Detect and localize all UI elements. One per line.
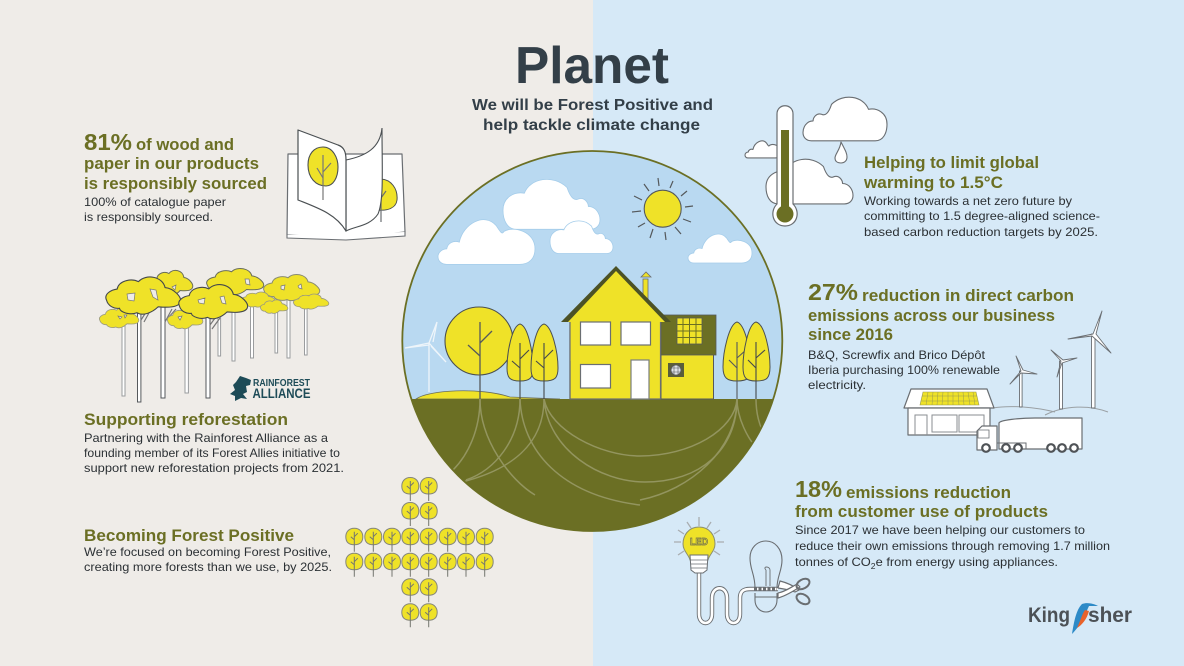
old bulb [750, 541, 782, 588]
text block: customer emissions reduction: from customer use of products [795, 502, 1048, 521]
text block: limiting global warming: Helping to limit global [864, 153, 1039, 172]
icon: grid of small trees in a plus shape [346, 478, 493, 627]
icon: LED bulb, wire, scissors and old bulb [674, 517, 811, 623]
text block: customer emissions reduction: 18% [795, 476, 842, 502]
logo: Rainforest Alliance [230, 376, 310, 401]
text block: becoming forest positive [84, 526, 332, 574]
text block: direct carbon reduction: since 2016 [808, 325, 893, 344]
text block: supporting reforestation: Partnering with the Rainforest Alliance as a [84, 431, 328, 445]
scissors [778, 577, 811, 606]
text block: limiting global warming: based carbon reduction targets by 2025. [864, 225, 1098, 239]
icon: frog [230, 376, 251, 401]
trees left [445, 307, 558, 399]
central circular scene [400, 150, 785, 534]
text block: responsibly sourced wood and paper: of wood and [136, 135, 234, 154]
text block: becoming forest positive: creating more forests than we use, by 2025. [84, 560, 332, 574]
text block: becoming forest positive: We’re focused on becoming Forest Positive, [84, 545, 331, 559]
text block: customer emissions reduction: e from energy using appliances. [876, 555, 1058, 569]
icon: thermometer and clouds [745, 97, 887, 226]
text block: responsibly sourced wood and paper: 100% of catalogue paper [84, 195, 226, 209]
text block: limiting global warming: Working towards a net zero future by [864, 194, 1072, 208]
house [561, 266, 716, 399]
sun [632, 178, 693, 240]
text block: customer emissions reduction: 2 [871, 562, 876, 571]
subtitle: help tackle climate change [483, 117, 700, 134]
text block: supporting reforestation: Supporting reforestation [84, 410, 288, 429]
logo: Kingfisher [1028, 603, 1132, 634]
text block: direct carbon reduction: reduction in direct carbon [862, 286, 1074, 305]
text block: direct carbon reduction: 27% [808, 279, 858, 305]
text block: direct carbon reduction: Iberia purchasing 100% renewable [808, 363, 1000, 377]
sky [400, 150, 785, 400]
clouds [438, 179, 752, 264]
wire [699, 573, 778, 623]
wind turbine [405, 322, 446, 392]
text block: customer emissions reduction [795, 476, 1110, 571]
trees right [723, 322, 770, 399]
text block: responsibly sourced wood and paper: is responsibly sourced. [84, 210, 213, 224]
logo: Rainforest Alliance: ALLIANCE [252, 385, 310, 401]
clouds behind thermometer [745, 97, 887, 204]
text block: limiting global warming: warming to 1.5°C [863, 173, 1003, 192]
subtitle [472, 97, 713, 134]
right background panel [593, 0, 1184, 666]
icon: store with solar panels [904, 389, 994, 435]
text block: customer emissions reduction: Since 2017 we have been helping our customers to [795, 523, 1085, 537]
text block: direct carbon reduction: emissions across our business [808, 306, 1055, 325]
text block: direct carbon reduction: electricity. [808, 378, 866, 392]
icon: truck [977, 418, 1082, 452]
text block: customer emissions reduction: tonnes of CO [795, 555, 866, 569]
logo: Rainforest Alliance: RAINFOREST [253, 378, 310, 389]
text block: direct carbon reduction: B&Q, Screwfix and Brico Dépôt [808, 348, 986, 362]
thermometer [773, 106, 797, 226]
text block: limiting global warming [863, 153, 1100, 239]
roots [453, 399, 762, 505]
text block: supporting reforestation: founding member of its Forest Allies initiative to [84, 446, 340, 460]
text block: supporting reforestation: support new reforestation projects from 2021. [84, 461, 344, 475]
subtitle: We will be Forest Positive and [472, 97, 713, 114]
left background panel [0, 0, 593, 666]
yellow hill [416, 391, 560, 399]
text block: supporting reforestation [84, 410, 344, 475]
text block: responsibly sourced wood and paper: is responsibly sourced [84, 174, 267, 193]
ground [400, 399, 785, 534]
title: Planet [515, 37, 669, 95]
text block: limiting global warming: committing to 1.5 degree-aligned science- [864, 209, 1100, 223]
LED bulb [683, 527, 715, 560]
logo: Kingfisher: King [1028, 604, 1070, 627]
text block: responsibly sourced wood and paper [84, 129, 267, 224]
text block: responsibly sourced wood and paper: paper in our products [84, 154, 259, 173]
icon: LED bulb, wire, scissors and old bulb: LED [690, 537, 708, 548]
text block: direct carbon reduction [808, 279, 1074, 392]
text block: becoming forest positive: Becoming Forest Positive [84, 526, 294, 545]
logo: Kingfisher: sher [1088, 604, 1132, 627]
icon: open book with trees [287, 128, 405, 240]
illustration: forest of yellow trees [99, 269, 329, 402]
icon: kingfisher bird [1072, 603, 1098, 634]
text block: customer emissions reduction: reduce their own emissions through removing 1.7 million [795, 539, 1110, 553]
icon: wind turbines [993, 311, 1111, 415]
text block: customer emissions reduction: emissions reduction [846, 483, 1011, 502]
text block: responsibly sourced wood and paper: 81% [84, 129, 132, 155]
